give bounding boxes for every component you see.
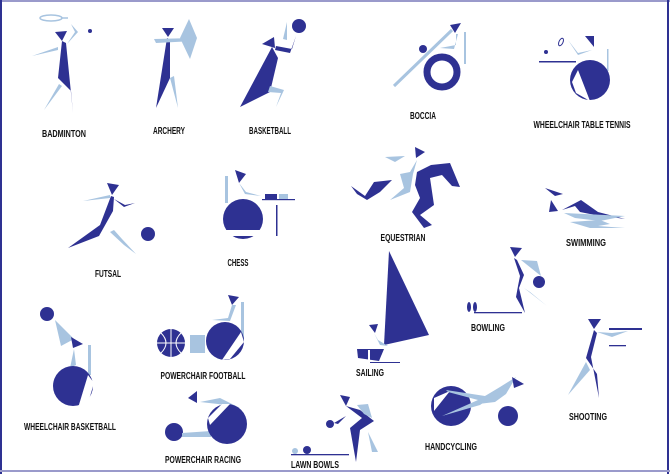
label: wheelchair basketball: WHEELCHAIR BASKETBALL [24, 422, 116, 433]
label: shooting: SHOOTING [569, 412, 607, 423]
pictogram: bowling [467, 247, 547, 313]
pictogram: futsal [68, 183, 155, 254]
label: handcycling: HANDCYCLING [425, 442, 477, 453]
pictogram: powerchair racing [165, 391, 247, 444]
label: bowling: BOWLING [471, 323, 505, 334]
pictogram: badminton [32, 15, 92, 113]
label: lawn bowls: LAWN BOWLS [291, 460, 339, 471]
label: archery: ARCHERY [153, 126, 185, 137]
pictogram: swimming [545, 188, 625, 228]
label: basketball: BASKETBALL [249, 126, 291, 137]
pictogram: basketball [240, 19, 306, 107]
label: chess: CHESS [228, 258, 249, 269]
label: equestrian: EQUESTRIAN [380, 233, 426, 244]
pictogram: wheelchair table tennis [539, 36, 610, 101]
pictogram: handcycling [431, 377, 524, 426]
label: badminton: BADMINTON [42, 129, 86, 140]
pictogram: powerchair football [157, 295, 244, 360]
pictogram: wheelchair basketball [40, 307, 94, 408]
pictogram: boccia [394, 23, 466, 87]
label: powerchair racing: POWERCHAIR RACING [165, 455, 241, 466]
pictogram: shooting [568, 319, 642, 398]
label: sailing: SAILING [356, 368, 384, 379]
label: swimming: SWIMMING [566, 238, 606, 249]
pictogram: sailing [357, 251, 429, 363]
pictogram: archery [154, 19, 197, 108]
label: futsal: FUTSAL [95, 269, 121, 280]
pictogram: equestrian [351, 147, 460, 228]
label: boccia: BOCCIA [410, 111, 436, 122]
pictogram: chess [223, 170, 295, 239]
pictogram: lawn bowls [291, 395, 378, 462]
label: powerchair football: POWERCHAIR FOOTBALL [160, 371, 246, 382]
